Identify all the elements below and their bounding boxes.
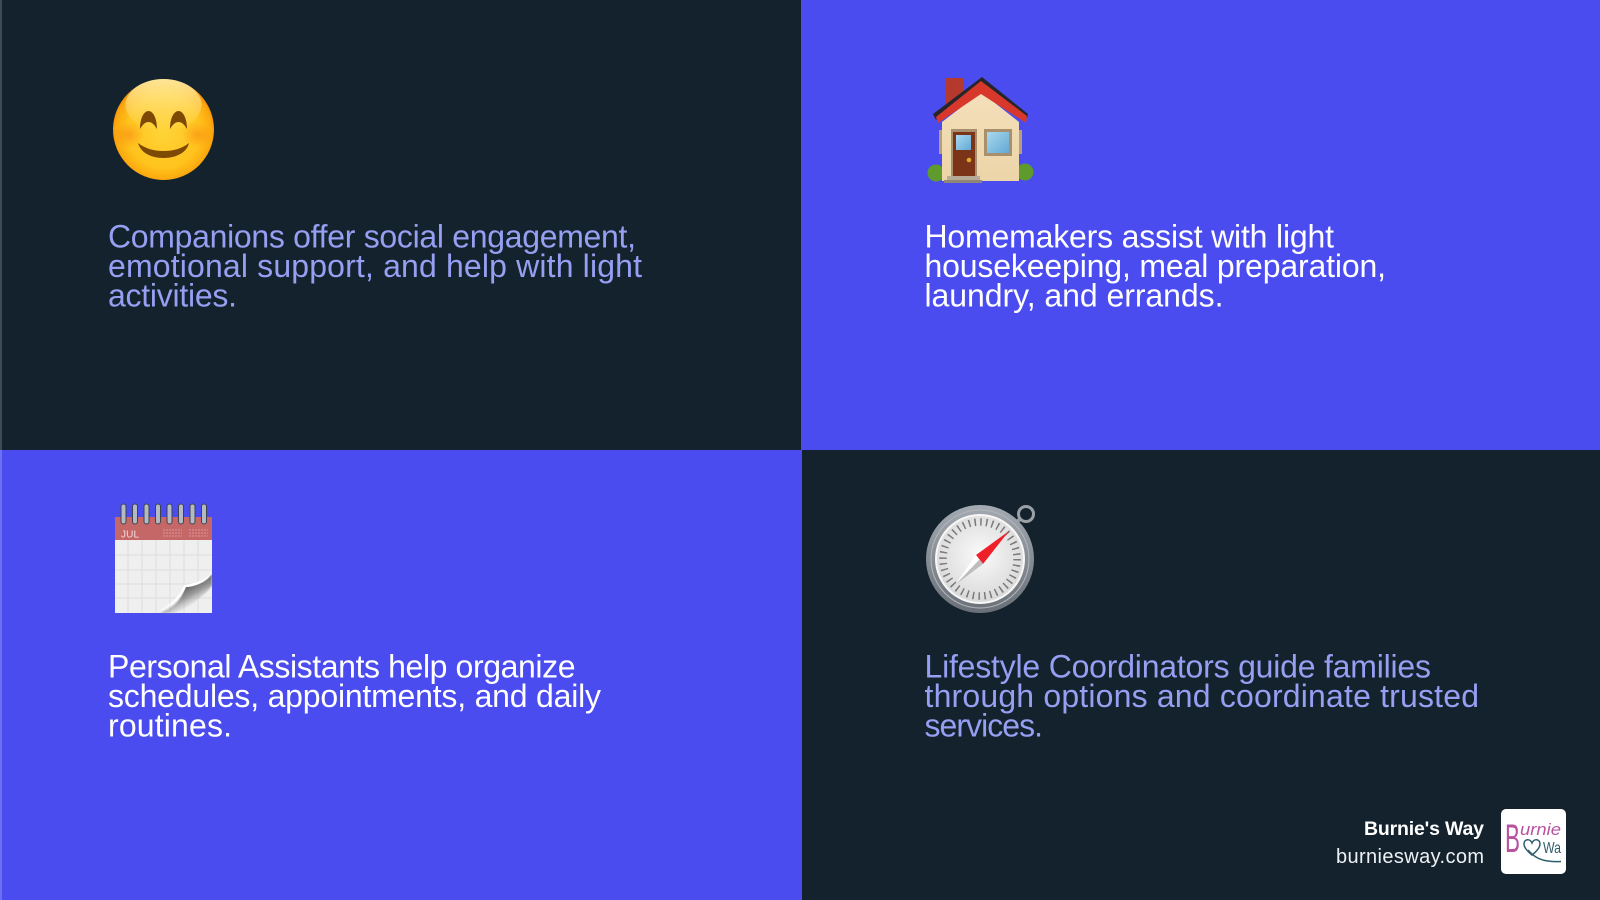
icon: compass <box>926 505 1034 613</box>
text block: companions: emotional support, and help with light <box>108 248 642 284</box>
text block: companions: Companions offer social engagement, <box>108 218 636 254</box>
icon: spiral calendar: JUL <box>121 530 139 540</box>
logo: Burnie's Way: B <box>1505 817 1520 861</box>
text block: companions: activities. <box>108 277 237 313</box>
text block: lifestyle coordinators <box>924 648 1479 743</box>
icon: spiral calendar <box>115 504 212 613</box>
text block: lifestyle coordinators: services. <box>924 707 1043 743</box>
logo: Burnie's Way: Wa <box>1543 840 1561 857</box>
text block: personal assistants: Personal Assistants help organize <box>108 648 576 684</box>
icon: house <box>928 77 1034 183</box>
text block: homemakers: Homemakers assist with light <box>924 218 1334 254</box>
logo: Burnie's Way: urnie <box>1520 820 1561 839</box>
panel: homemakers <box>801 0 1600 450</box>
brand name and URL: Burnie's Way <box>1364 818 1484 840</box>
panel: companions <box>0 0 801 450</box>
text block: homemakers: laundry, and errands. <box>924 277 1224 313</box>
brand name and URL <box>1336 818 1484 868</box>
text block: lifestyle coordinators: Lifestyle Coordinators guide families <box>924 648 1431 684</box>
brand name and URL: burniesway.com <box>1336 846 1484 868</box>
text block: companions <box>108 218 642 313</box>
panel: personal assistants <box>0 450 802 900</box>
logo: Burnie's Way <box>1501 809 1566 874</box>
text block: personal assistants: routines. <box>108 707 232 743</box>
text block: homemakers: housekeeping, meal preparation, <box>924 248 1386 284</box>
text block: personal assistants <box>108 648 601 743</box>
text block: homemakers <box>924 218 1386 313</box>
icon: smiling face <box>112 79 214 180</box>
panel: lifestyle coordinators <box>802 450 1600 900</box>
text block: personal assistants: schedules, appointments, and daily <box>108 678 601 714</box>
text block: lifestyle coordinators: through options and coordinate trusted <box>924 678 1479 714</box>
